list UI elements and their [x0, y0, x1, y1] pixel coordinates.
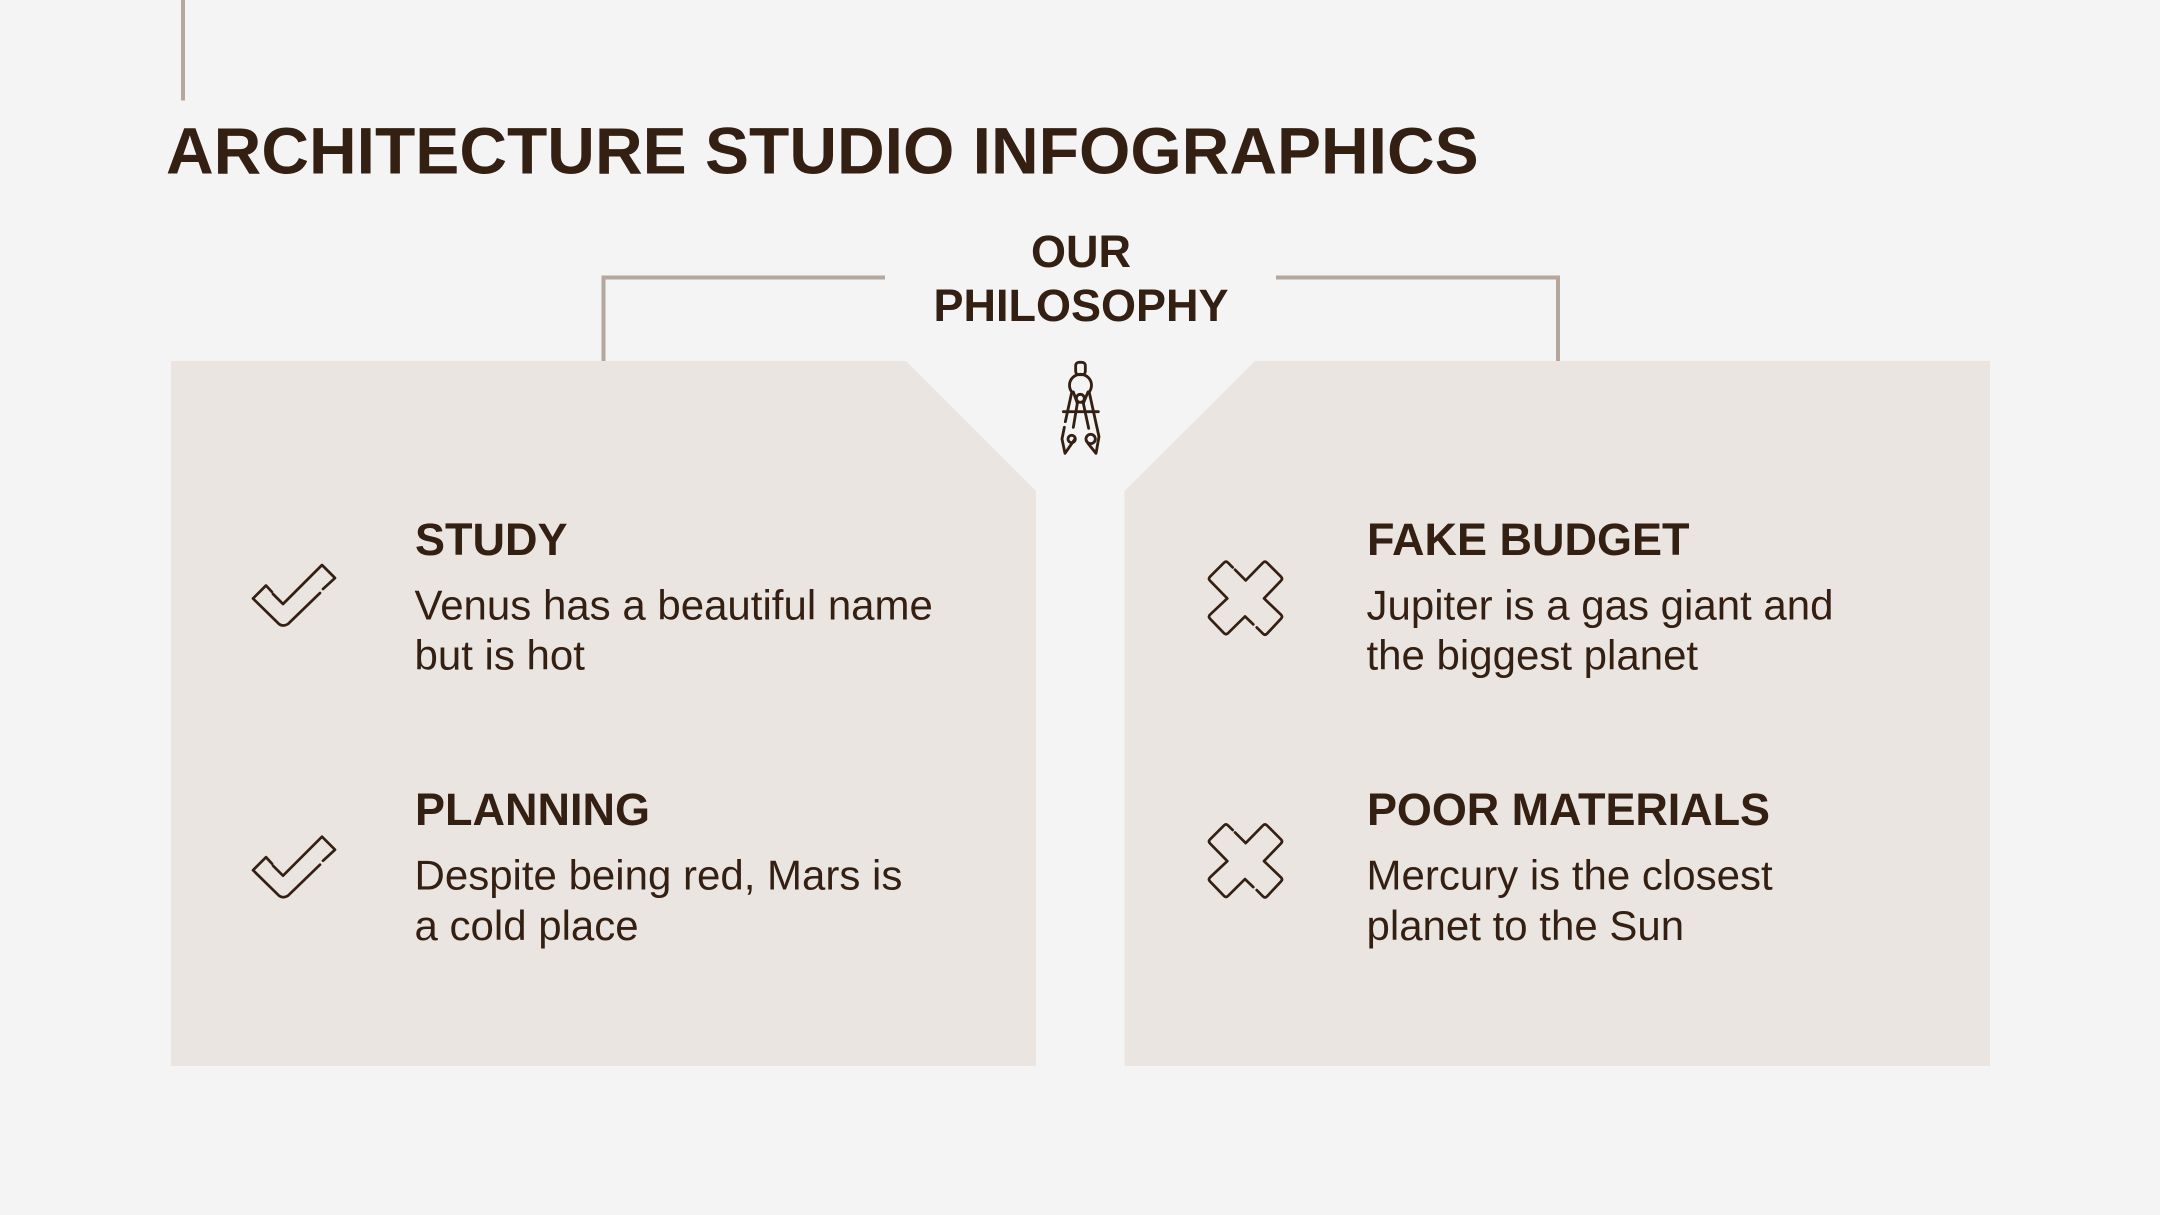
heading: our philosophy: OUR: [1031, 226, 1131, 277]
connector: right: [1276, 278, 1558, 362]
item: study: Venus has a beautiful name: [414, 582, 933, 628]
item: fake budget: the biggest planet: [1366, 632, 1698, 678]
heading: our philosophy: [933, 226, 1229, 331]
icon: cross 2: [1209, 824, 1282, 897]
connector: left: [604, 278, 885, 362]
item: fake budget: FAKE BUDGET: [1367, 514, 1690, 565]
icon: compass: [1062, 362, 1099, 453]
icon: cross 1: [1209, 562, 1282, 635]
title: ARCHITECTURE STUDIO INFOGRAPHICS: [166, 114, 1479, 188]
item: fake budget: [1366, 514, 1833, 678]
heading: our philosophy: PHILOSOPHY: [933, 280, 1229, 331]
icon: check 2: [253, 837, 335, 897]
item: study: STUDY: [415, 514, 568, 565]
item: planning: [414, 784, 902, 949]
item: poor materials: [1366, 784, 1773, 949]
item: planning: a cold place: [414, 902, 639, 949]
panel: right: [1124, 361, 1990, 1066]
item: study: [414, 514, 933, 678]
icon: check 1: [253, 565, 335, 626]
item: poor materials: planet to the Sun: [1366, 902, 1684, 949]
item: planning: PLANNING: [415, 784, 650, 835]
item: study: but is hot: [414, 632, 585, 678]
item: planning: Despite being red, Mars is: [414, 852, 902, 898]
item: poor materials: Mercury is the closest: [1366, 852, 1773, 898]
accent line: [181, 0, 185, 100]
panel: left: [171, 361, 1036, 1066]
item: poor materials: POOR MATERIALS: [1367, 784, 1770, 835]
item: fake budget: Jupiter is a gas giant and: [1366, 582, 1833, 628]
